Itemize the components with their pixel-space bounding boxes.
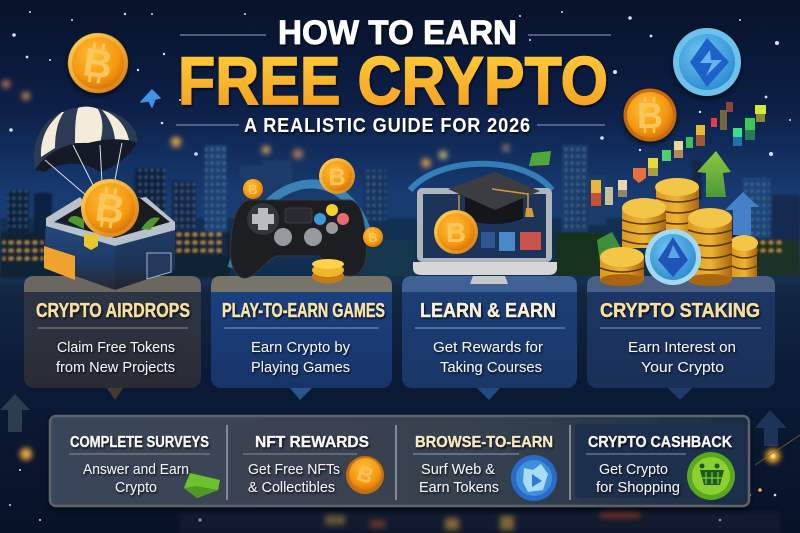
icon: blue cursor arrow (141, 90, 160, 107)
airdrop coin: B (92, 185, 127, 233)
method: browse-to-earn: Surf Web & (421, 462, 495, 478)
icon: parachute with open airdrop box (34, 107, 175, 290)
title line: Free Crypto: FREE CRYPTO (178, 43, 608, 119)
blue coin front (645, 229, 701, 285)
controller coin stack (312, 259, 344, 284)
game coin small left (243, 179, 263, 199)
icon: gold coin stacks (597, 178, 758, 286)
icon: blue token coin top right (673, 28, 741, 96)
icon: green up arrow (697, 151, 731, 197)
laptop base (413, 262, 557, 275)
description (56, 339, 175, 376)
game coin large: B (328, 164, 346, 191)
panel: crypto staking (587, 276, 775, 400)
description (628, 339, 736, 376)
method: nft rewards: Get Free NFTs (248, 462, 340, 478)
parachute strings (45, 143, 122, 197)
icon: floating bitcoin coin top left (64, 29, 132, 97)
description (433, 339, 543, 376)
laptop coin (434, 210, 478, 254)
icon: laptop with graduation cap (410, 164, 557, 284)
method: browse-to-earn: BROWSE-TO-EARN (415, 434, 553, 451)
coin stack front (597, 232, 644, 286)
panel: secondary methods (50, 416, 749, 506)
subtitle: A REALISTIC GUIDE FOR 2026 (244, 114, 531, 137)
heading: LEARN & EARN (420, 300, 556, 322)
game coin small right (363, 227, 383, 247)
laptop screen (417, 188, 552, 262)
method: complete surveys: Crypto (115, 480, 157, 496)
description: Earn Interest on (628, 339, 736, 356)
icon: green shopping cart (687, 452, 735, 500)
panel: crypto airdrops (24, 276, 201, 400)
background: faded lower arrows and lights (0, 394, 800, 533)
panel: learn and earn (402, 276, 577, 400)
controller body (230, 200, 366, 278)
background: city skyline (0, 145, 800, 278)
method: nft rewards: NFT REWARDS (255, 434, 369, 451)
icon: floating bitcoin coin top left: B (80, 40, 115, 88)
method: nft rewards: & Collectibles (248, 480, 335, 496)
method: crypto cashback: for Shopping (596, 480, 680, 496)
description: Taking Courses (440, 359, 542, 376)
title block (176, 14, 611, 137)
icon: bitcoin coin right: B (637, 95, 663, 136)
method: browse-to-earn: Earn Tokens (419, 480, 499, 496)
description: Earn Crypto by (251, 339, 350, 356)
description: Get Rewards for (433, 339, 543, 356)
icon: green envelope (184, 473, 220, 498)
icon: bitcoin coin (341, 451, 389, 499)
airdrop box (44, 197, 175, 290)
method: complete surveys: Answer and Earn (83, 462, 189, 478)
icon: blue browser globe (511, 455, 557, 501)
icon: green envelope floating (529, 151, 551, 166)
description: Claim Free Tokens (57, 339, 175, 356)
icon: blue up arrow (725, 192, 759, 235)
laptop coin: B (446, 217, 466, 248)
method: crypto cashback (586, 434, 735, 500)
game coin large (319, 158, 355, 194)
icon: bitcoin coin right (624, 88, 676, 142)
graduation cap (448, 172, 540, 224)
game coin small right: B (368, 230, 378, 245)
heading: CRYPTO AIRDROPS (36, 300, 190, 322)
method: browse-to-earn (413, 434, 557, 501)
method: complete surveys (69, 434, 220, 498)
description (251, 339, 350, 376)
game coin small left: B (248, 182, 258, 197)
coin stack back (655, 178, 699, 234)
airdrop coin (77, 175, 143, 241)
method: crypto cashback: Get Crypto (599, 462, 668, 478)
description: Playing Games (251, 359, 350, 376)
chart: rising candlesticks (591, 102, 766, 206)
heading: CRYPTO STAKING (600, 300, 760, 322)
coin stack tall (688, 208, 732, 286)
heading: PLAY-TO-EARN GAMES (222, 300, 385, 322)
method: nft rewards (243, 434, 389, 499)
parachute canopy (34, 107, 137, 172)
description: Your Crypto (641, 359, 724, 376)
coin stack left (622, 198, 666, 248)
method: crypto cashback: CRYPTO CASHBACK (588, 434, 732, 451)
description: from New Projects (56, 359, 175, 376)
panel: play-to-earn games (211, 276, 392, 400)
method: complete surveys: COMPLETE SURVEYS (70, 434, 209, 451)
icon: bitcoin coin: B (353, 460, 377, 489)
icon: game controller with coins (230, 158, 383, 284)
coin stack right (730, 235, 758, 277)
title line: How to Earn: HOW TO EARN (278, 14, 517, 52)
